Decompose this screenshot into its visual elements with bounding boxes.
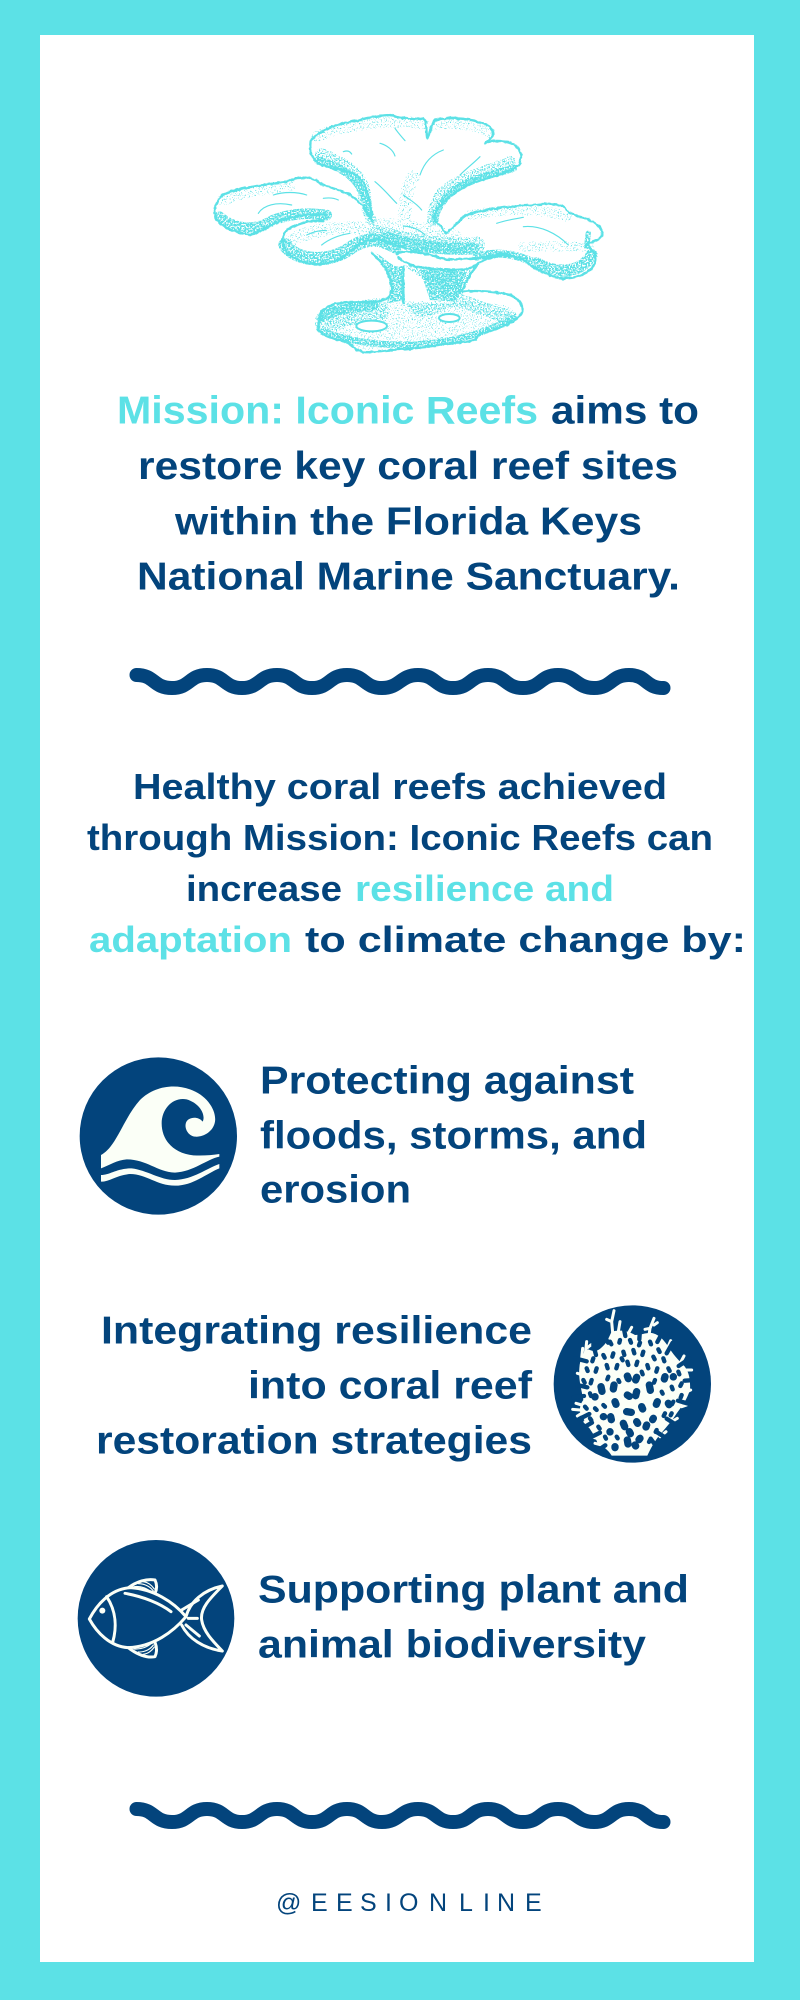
text block: resilience intro: Healthy coral reefs achieved	[133, 766, 667, 807]
text: protecting: erosion	[260, 1168, 411, 1212]
text: protecting: Protecting against	[260, 1060, 634, 1102]
icon: coral branch	[554, 1305, 711, 1463]
text block: resilience intro: resilience and	[355, 868, 614, 909]
text: integrating: restoration strategies	[96, 1420, 532, 1462]
text: integrating: into coral reef	[248, 1364, 533, 1408]
heading: mission statement: restore key coral reef sites	[138, 445, 678, 488]
wave divider top	[136, 675, 664, 688]
text block: resilience intro: increase	[186, 868, 342, 909]
text block: resilience intro: through Mission: Iconic Reefs can	[87, 817, 713, 858]
heading: mission statement: aims to	[551, 390, 699, 432]
text: supporting: Supporting plant and	[258, 1568, 689, 1612]
icon: wave	[80, 1057, 237, 1215]
icon: coral illustration	[215, 115, 602, 352]
heading: mission statement: within the Florida Keys	[174, 500, 642, 544]
text: supporting: animal biodiversity	[258, 1624, 646, 1666]
text: supporting	[258, 1568, 689, 1666]
heading: mission statement: National Marine Sanctuary.	[137, 556, 680, 598]
text: integrating	[96, 1310, 533, 1462]
text: integrating: Integrating resilience	[101, 1310, 532, 1352]
coral branch edge notches	[573, 1326, 695, 1451]
text block: resilience intro: adaptation	[89, 919, 292, 960]
text block: resilience intro: to climate change by:	[305, 919, 746, 960]
coral inner detail lines	[258, 128, 568, 245]
coral holes	[356, 314, 460, 331]
coral branch holes	[583, 1340, 682, 1448]
icon: fish	[78, 1540, 234, 1697]
coral outline	[215, 115, 602, 352]
heading: mission statement	[117, 390, 699, 598]
text: protecting: floods, storms, and	[260, 1114, 647, 1158]
text: protecting	[260, 1060, 647, 1212]
footer handle: @EESIONLINE	[276, 1889, 542, 1917]
text block: resilience intro	[87, 766, 746, 960]
heading: mission statement: Mission: Iconic Reefs	[117, 390, 538, 432]
wave divider bottom	[136, 1809, 664, 1822]
